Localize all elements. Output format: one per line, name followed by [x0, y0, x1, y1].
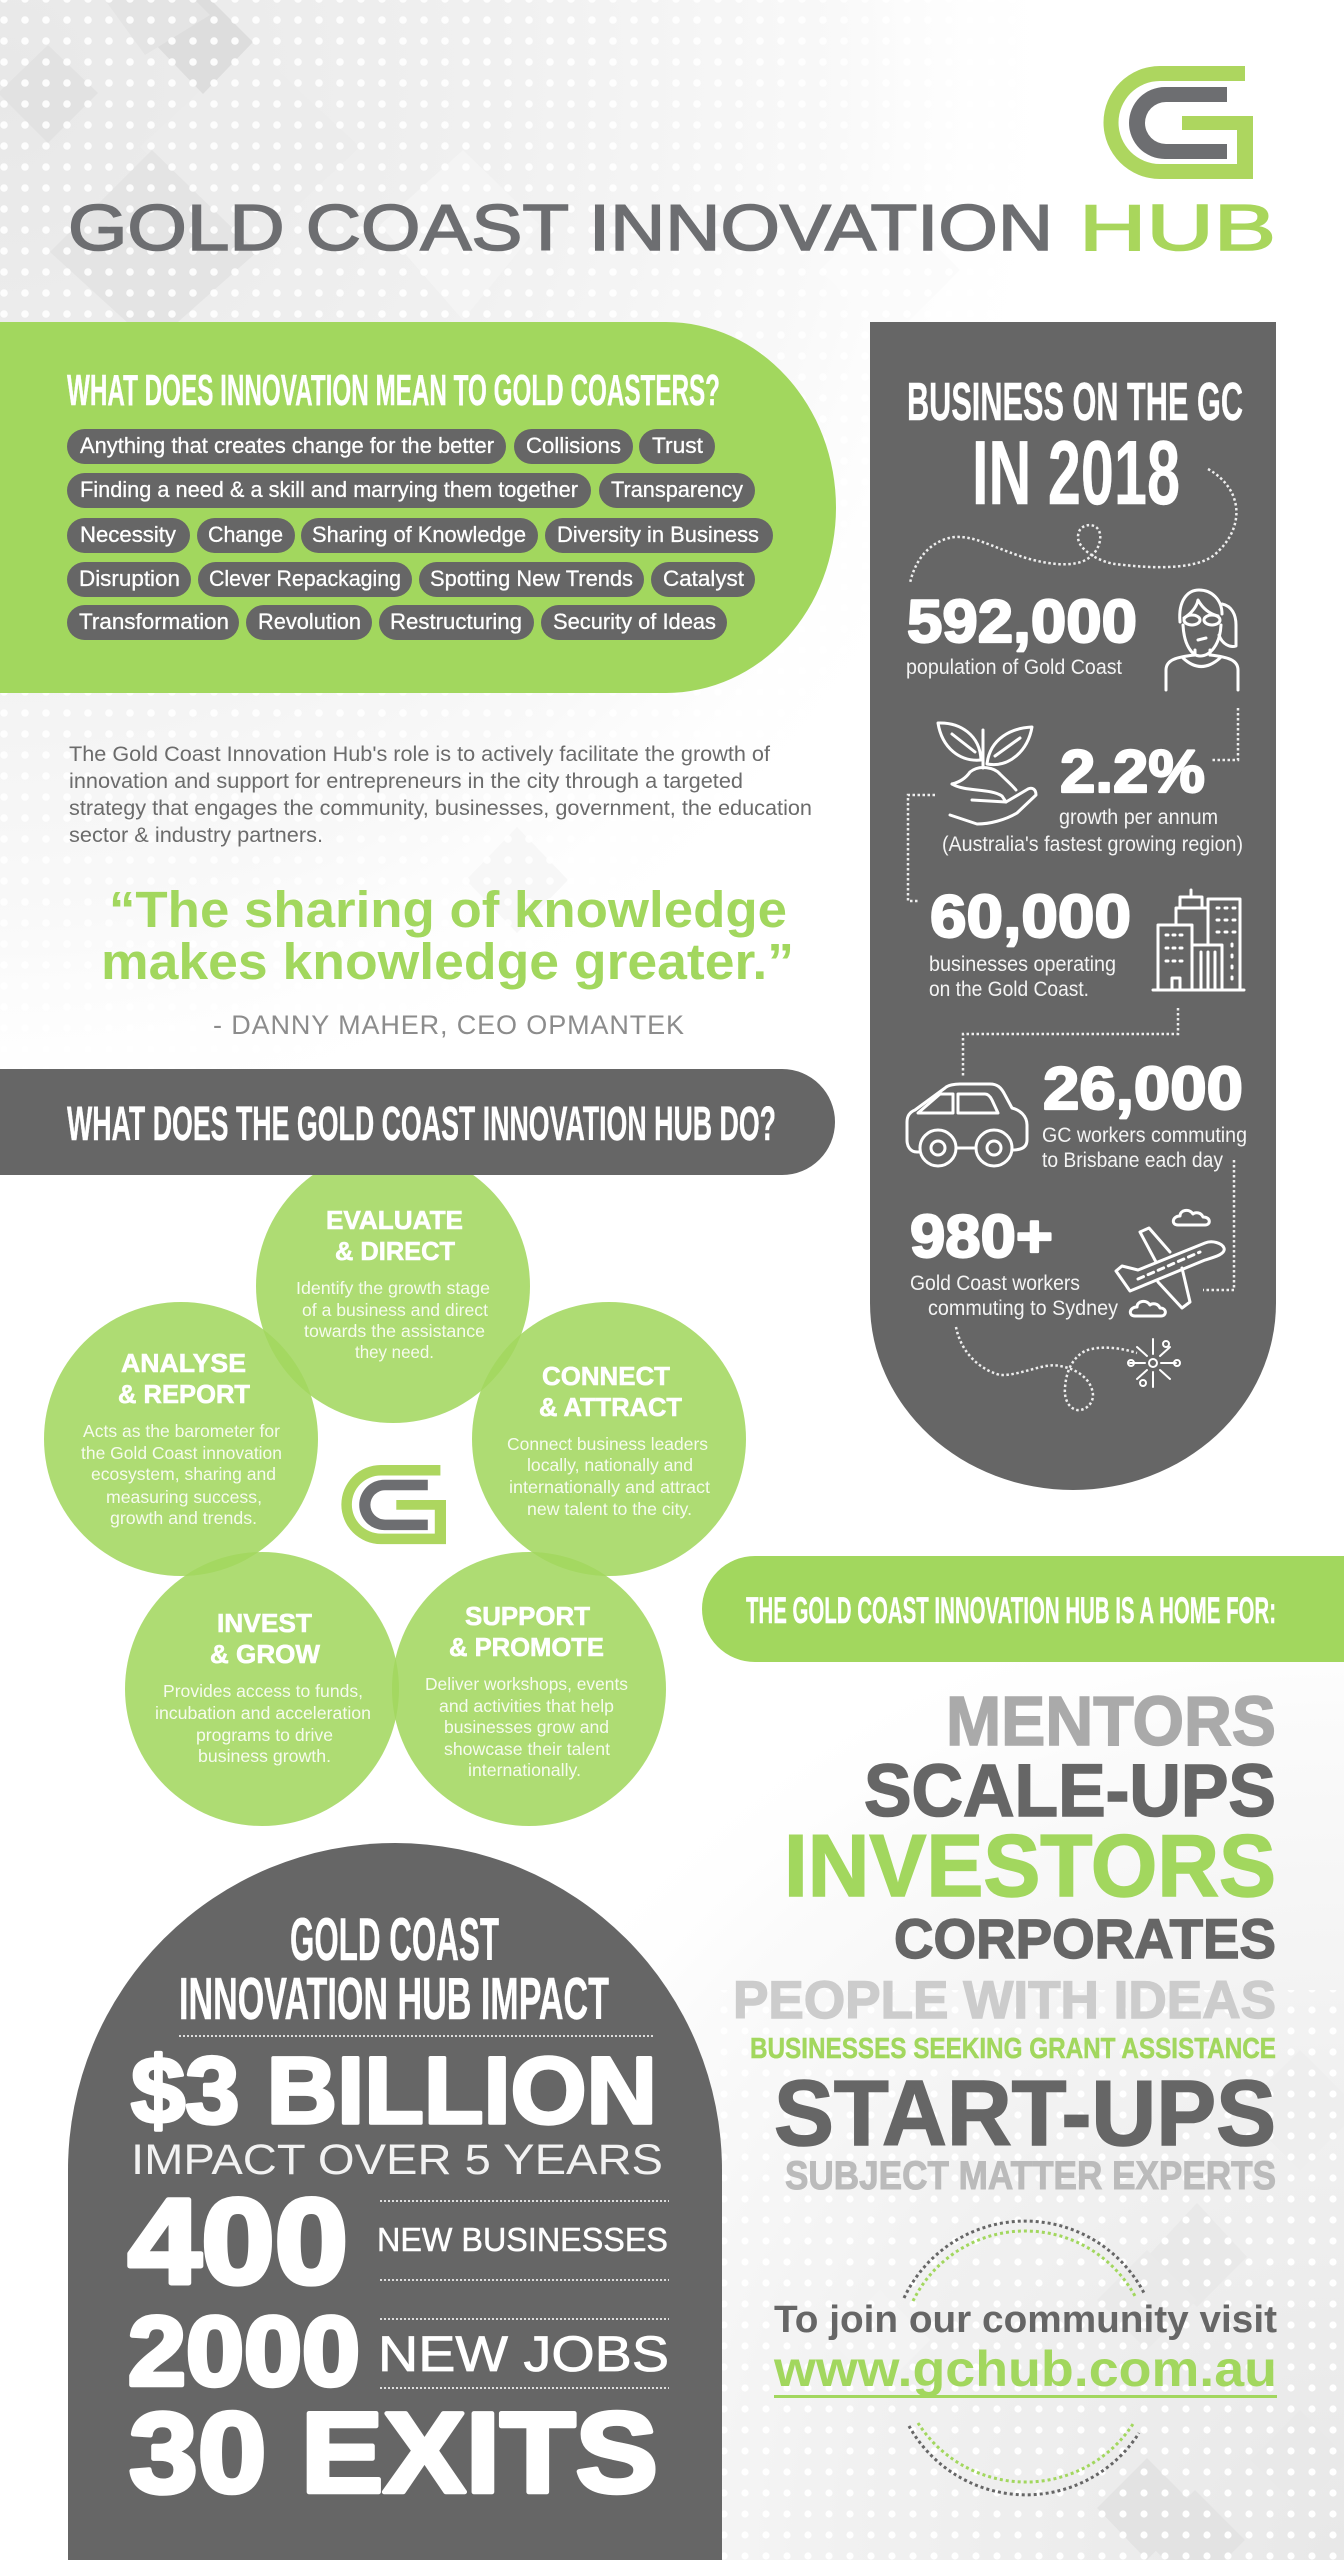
- icon: city buildings: [1153, 890, 1244, 990]
- dotted route: plant to businesses: [908, 795, 935, 901]
- stat: population: 592,000: [907, 588, 1137, 655]
- stat: new businesses: [128, 2173, 668, 2309]
- pills: innovation words: Anything that creates change for the better: [80, 433, 494, 458]
- stat: population: [906, 588, 1137, 679]
- circle: analyse and report: & REPORT: [118, 1379, 250, 1409]
- circle: analyse and report: ecosystem, sharing and: [91, 1464, 276, 1484]
- stat: growth: [942, 738, 1243, 856]
- text block: hub role: strategy that engages the community, businesses, government, the education: [69, 796, 812, 820]
- circle: analyse and report: ANALYSE: [121, 1348, 246, 1378]
- circle: support and promote: Deliver workshops, events: [425, 1674, 628, 1694]
- word list: who the hub is home for: INVESTORS: [784, 1816, 1276, 1915]
- panel heading: IN 2018: [972, 423, 1180, 524]
- circle: connect and attract: internationally and attract: [509, 1477, 710, 1497]
- text block: hub role: sector & industry partners.: [69, 823, 323, 847]
- stat: Brisbane commuters: 26,000: [1043, 1055, 1243, 1122]
- stat: Brisbane commuters: to Brisbane each day: [1042, 1149, 1223, 1172]
- word list: who the hub is home for: SCALE-UPS: [864, 1749, 1276, 1832]
- stat: Sydney commuters: [910, 1203, 1118, 1320]
- circle: invest and grow: incubation and acceleration: [155, 1703, 371, 1723]
- circle: invest and grow: & GROW: [210, 1639, 320, 1669]
- quote: “The sharing of knowledge: [109, 881, 787, 938]
- stat: 3 billion impact: IMPACT OVER 5 YEARS: [131, 2136, 663, 2184]
- pills: innovation words: Disruption: [79, 566, 180, 591]
- logo: GC mark: [1104, 66, 1253, 179]
- circle: connect and attract: new talent to the city.: [527, 1499, 692, 1519]
- pills: innovation words: Collisions: [526, 433, 621, 458]
- pills: innovation words: Spotting New Trends: [430, 566, 633, 591]
- heading: innovation meaning: WHAT DOES INNOVATION MEAN TO GOLD COASTERS?: [67, 366, 720, 415]
- pills: innovation words: [67, 429, 773, 640]
- stat: exits: 30 EXITS: [129, 2390, 658, 2517]
- text block: hub role: The Gold Coast Innovation Hub's role is to actively facilitate the growth of: [69, 742, 770, 766]
- pills: innovation words: Transformation: [79, 609, 229, 634]
- pills: innovation words: Restructuring: [390, 609, 522, 634]
- circle: analyse and report: the Gold Coast innovation: [81, 1443, 282, 1463]
- circle: invest and grow: [155, 1608, 371, 1766]
- circle: support and promote: [425, 1601, 628, 1780]
- quote: [101, 881, 794, 990]
- logo: small GC mark: [341, 1465, 446, 1544]
- circle: analyse and report: Acts as the barometer for: [83, 1421, 280, 1441]
- circle: analyse and report: measuring success,: [106, 1487, 262, 1507]
- circle: support and promote: SUPPORT: [465, 1601, 590, 1631]
- word list: who the hub is home for: CORPORATES: [894, 1907, 1276, 1970]
- stat: new jobs: [128, 2296, 669, 2406]
- pills: innovation words: Revolution: [258, 609, 361, 634]
- stat: Sydney commuters: commuting to Sydney: [928, 1297, 1118, 1320]
- circle: invest and grow: programs to drive: [196, 1725, 333, 1745]
- panel: hub impact: [68, 1843, 722, 2560]
- circle: connect and attract: CONNECT: [542, 1361, 670, 1391]
- dotted route: person to plant: [1212, 708, 1238, 760]
- word list: who the hub is home for: [733, 1682, 1276, 2198]
- stat: new jobs: NEW JOBS: [378, 2326, 669, 2382]
- stat: businesses: 60,000: [930, 883, 1131, 950]
- banner: what does the hub do: WHAT DOES THE GOLD COAST INNOVATION HUB DO?: [67, 1098, 776, 1151]
- call to action: www.gchub.com.au: [773, 2341, 1277, 2397]
- banner: home for: [702, 1556, 1344, 1662]
- dotted route: bottom: [956, 1327, 1137, 1410]
- circle: evaluate and direct: Identify the growth stage: [296, 1278, 490, 1298]
- dotted route: businesses to car: [963, 1008, 1178, 1076]
- circle: invest and grow: business growth.: [198, 1746, 331, 1766]
- text block: hub role: [69, 742, 812, 847]
- word list: who the hub is home for: START-UPS: [774, 2061, 1276, 2165]
- pills: innovation words: Change: [208, 522, 283, 547]
- word list: who the hub is home for: SUBJECT MATTER EXPERTS: [785, 2154, 1276, 2198]
- pills: innovation words: Trust: [652, 433, 703, 458]
- stat: 3 billion impact: [131, 2038, 663, 2184]
- circle: evaluate and direct: of a business and direct: [302, 1300, 488, 1320]
- dotted route: top: [910, 469, 1236, 583]
- banner: what does the hub do: [0, 1069, 835, 1175]
- stat: businesses: on the Gold Coast.: [929, 978, 1089, 1001]
- circle: evaluate and direct: they need.: [355, 1342, 434, 1362]
- circle: evaluate and direct: [296, 1205, 490, 1362]
- stat: growth: 2.2%: [1060, 738, 1205, 805]
- circle: support and promote: and activities that help: [439, 1696, 614, 1716]
- stat: population: population of Gold Coast: [906, 656, 1122, 679]
- word list: who the hub is home for: PEOPLE WITH IDEAS: [733, 1971, 1276, 2030]
- call to action: [773, 2221, 1277, 2495]
- pills: innovation words: Sharing of Knowledge: [312, 522, 526, 547]
- pills: innovation words: Clever Repackaging: [209, 566, 401, 591]
- circle: support and promote: & PROMOTE: [449, 1632, 604, 1662]
- stat: new businesses: 400: [128, 2173, 348, 2309]
- stat: businesses: businesses operating: [929, 953, 1116, 976]
- panel heading: INNOVATION HUB IMPACT: [179, 1966, 609, 2032]
- circle: connect and attract: locally, nationally and: [527, 1455, 693, 1475]
- stat: Sydney commuters: 980+: [910, 1203, 1053, 1270]
- stat: businesses: [929, 883, 1131, 1001]
- circle: analyse and report: growth and trends.: [110, 1508, 257, 1528]
- circle: invest and grow: Provides access to funds,: [163, 1681, 363, 1701]
- title: GOLD COAST INNOVATION: [68, 191, 1053, 264]
- panel heading: [179, 1906, 609, 2032]
- icon: plane and clouds: [1116, 1210, 1224, 1316]
- quote: makes knowledge greater.”: [101, 933, 794, 990]
- circle: analyse and report: [81, 1348, 282, 1528]
- quote attribution: - DANNY MAHER, CEO OPMANTEK: [213, 1010, 684, 1040]
- icon: person: [1166, 590, 1238, 690]
- circle: support and promote: internationally.: [468, 1760, 581, 1780]
- title: HUB: [1079, 191, 1276, 264]
- word list: who the hub is home for: MENTORS: [946, 1682, 1276, 1760]
- circle: evaluate and direct: EVALUATE: [326, 1205, 463, 1235]
- icon: car: [907, 1084, 1027, 1166]
- panel heading: GOLD COAST: [290, 1906, 499, 1973]
- circles: what the hub does: [44, 1149, 746, 1826]
- circle: evaluate and direct: towards the assistance: [304, 1321, 485, 1341]
- panel: business on the GC in 2018: [870, 322, 1276, 1490]
- icon: plant in hand: [938, 723, 1036, 824]
- circle: support and promote: businesses grow and: [444, 1717, 609, 1737]
- stat: growth: (Australia's fastest growing region): [942, 833, 1243, 856]
- pills: innovation words: Catalyst: [663, 566, 744, 591]
- circle: connect and attract: Connect business leaders: [507, 1434, 708, 1454]
- stat: Sydney commuters: Gold Coast workers: [910, 1272, 1080, 1295]
- stat: Brisbane commuters: [1042, 1055, 1247, 1172]
- stat: growth: growth per annum: [1059, 806, 1218, 829]
- circle: invest and grow: INVEST: [217, 1608, 312, 1638]
- pills: innovation words: Transparency: [611, 477, 743, 502]
- stat: new businesses: NEW BUSINESSES: [377, 2221, 668, 2258]
- circle: evaluate and direct: & DIRECT: [335, 1236, 455, 1266]
- pills: innovation words: Necessity: [80, 522, 176, 547]
- stat: 3 billion impact: $3 BILLION: [131, 2038, 657, 2144]
- title: [68, 191, 1276, 264]
- text block: hub role: innovation and support for entrepreneurs in the city through a targeted: [69, 769, 743, 793]
- dotted route: car to plane: [1203, 1160, 1234, 1290]
- pills: innovation words: Diversity in Business: [557, 522, 759, 547]
- stat: new jobs: 2000: [128, 2296, 360, 2406]
- circle: connect and attract: & ATTRACT: [539, 1392, 682, 1422]
- panel: what does innovation mean: [0, 322, 836, 693]
- panel heading: [907, 372, 1243, 524]
- stat: Brisbane commuters: GC workers commuting: [1042, 1124, 1247, 1147]
- pills: innovation words: Finding a need & a skill and marrying them together: [80, 477, 578, 502]
- icon: firework: [1128, 1339, 1180, 1387]
- pills: innovation words: Security of Ideas: [553, 609, 716, 634]
- circle: connect and attract: [507, 1361, 710, 1519]
- call to action: To join our community visit: [774, 2299, 1277, 2341]
- circle: support and promote: showcase their talent: [444, 1739, 610, 1759]
